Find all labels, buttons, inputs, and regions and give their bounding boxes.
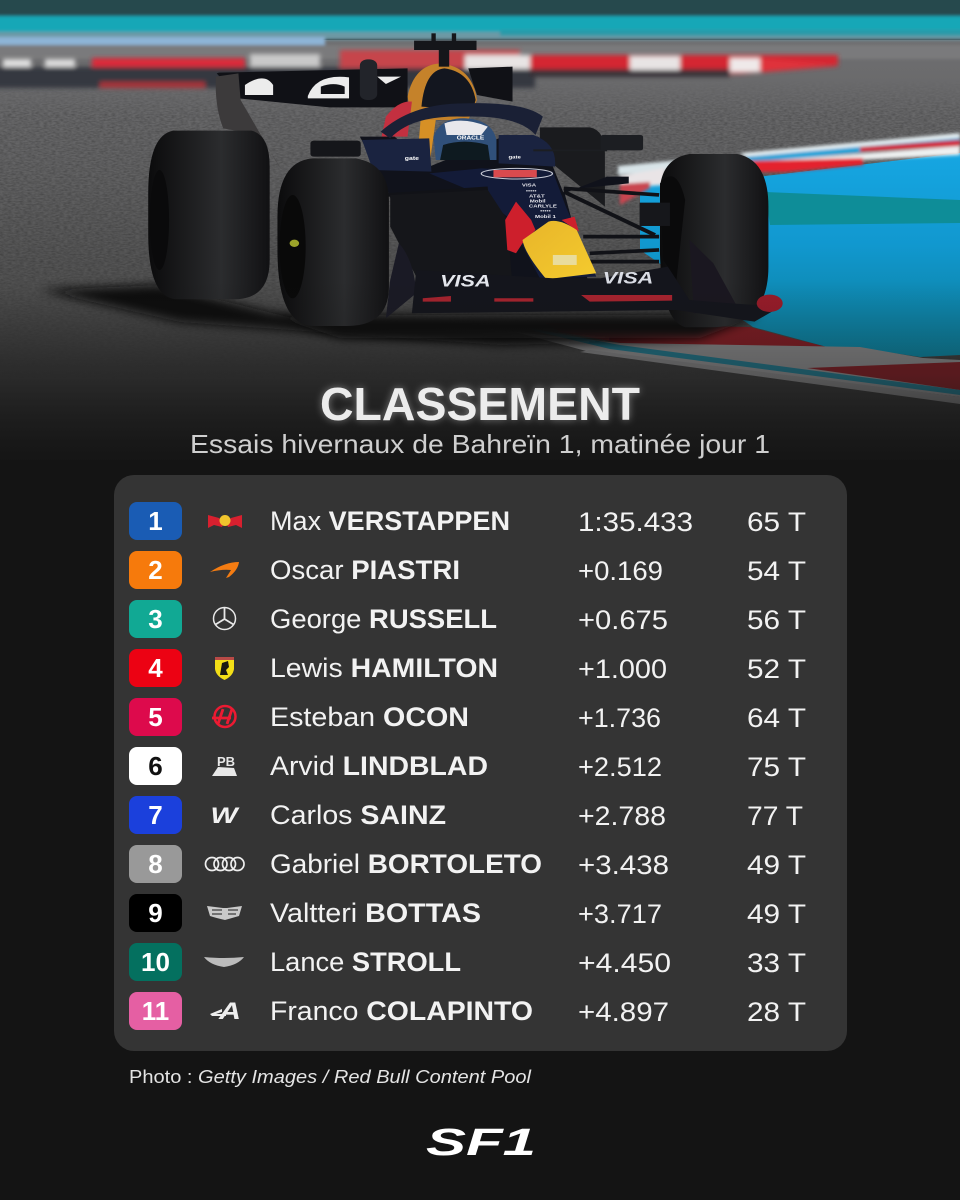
helmet	[434, 118, 496, 160]
nose sponsor list: CARLYLE	[529, 204, 557, 209]
row 11: 11	[142, 996, 169, 1026]
subtitle: Essais hivernaux de Bahreïn 1, matinée jour 1	[190, 429, 770, 459]
row 1: 1:35.433	[578, 507, 693, 537]
row 6: 6	[148, 751, 163, 781]
row 11: Franco COLAPINTO	[270, 996, 533, 1026]
icon: Cadillac	[207, 906, 242, 920]
background teal runoff	[0, 0, 960, 59]
row 6	[129, 747, 806, 785]
row 4: +1.000	[578, 654, 667, 684]
row 1: Max VERSTAPPEN	[270, 506, 510, 536]
row 2	[129, 551, 806, 589]
halo	[381, 103, 543, 138]
row 11: +4.897	[578, 997, 669, 1027]
row 1: 1	[148, 506, 163, 536]
background kerb	[0, 50, 838, 88]
nose sponsor list	[522, 183, 557, 220]
row 8: Gabriel BORTOLETO	[270, 849, 542, 879]
row 10: 33 T	[747, 948, 806, 978]
row 3: +0.675	[578, 605, 668, 635]
racing car: gate	[405, 156, 420, 162]
nose sponsor list: AT&T	[529, 194, 545, 199]
row 4: 52 T	[747, 654, 806, 684]
car shadow	[40, 285, 700, 345]
icon: Williams: W	[210, 803, 240, 828]
icon: Audi	[206, 858, 244, 870]
row 9: 49 T	[747, 899, 806, 929]
right blue runoff area	[640, 153, 960, 357]
right kerb stripes	[618, 133, 960, 205]
front suspension	[388, 188, 659, 262]
front nose body	[429, 168, 596, 278]
icon: Ferrari	[215, 657, 234, 680]
logo: SF1: SF1	[426, 1122, 536, 1164]
row 3: 56 T	[747, 605, 806, 635]
title: CLASSEMENT	[320, 378, 640, 430]
icon: Haas	[212, 706, 236, 727]
photo: race track with Red Bull car	[0, 0, 960, 470]
bottom kerb	[515, 323, 960, 404]
panel: classification table	[114, 475, 847, 1051]
row 9: Valtteri BOTTAS	[270, 898, 481, 928]
row 3	[129, 600, 806, 638]
VISA wing labels: VISA	[440, 273, 491, 291]
left front endplate	[386, 243, 416, 318]
row 5: Esteban OCON	[270, 702, 469, 732]
row 5: 64 T	[747, 703, 806, 733]
title: CLASSEMENT	[320, 378, 640, 430]
row 10: +4.450	[578, 948, 671, 978]
row 6: +2.512	[578, 752, 662, 782]
wing endplate	[216, 73, 282, 170]
row 5: 5	[148, 702, 163, 732]
row 2: Oscar PIASTRI	[270, 555, 460, 585]
row 3: 3	[148, 604, 163, 634]
row 10: Lance STROLL	[270, 947, 461, 977]
row 11: 28 T	[747, 997, 806, 1027]
nose sponsor list: VISA	[522, 183, 536, 188]
row 9	[129, 894, 806, 932]
row 6: 75 T	[747, 752, 806, 782]
row 4: 4	[148, 653, 163, 683]
row 1: 65 T	[747, 507, 806, 537]
racing car	[148, 33, 783, 327]
icon: Racing Bulls	[212, 754, 237, 776]
row 7: +2.788	[578, 801, 666, 831]
rear wing	[217, 68, 408, 107]
icon: Alpine: A	[218, 998, 241, 1025]
asphalt	[0, 40, 960, 460]
photo credit: Photo : Getty Images / Red Bull Content Pool	[129, 1067, 532, 1087]
nose sponsor list: •••••	[526, 189, 537, 194]
row 10	[129, 943, 806, 981]
row 2: 2	[148, 555, 163, 585]
front wing	[412, 267, 781, 322]
row 10: 10	[141, 947, 170, 977]
nose sponsor list: Mobil	[530, 199, 546, 204]
row 7: 77 T	[747, 801, 803, 831]
row 9: +3.717	[578, 899, 662, 929]
icon: Alpine	[210, 998, 241, 1025]
row 6: Arvid LINDBLAD	[270, 751, 488, 781]
icon: Red Bull	[208, 515, 242, 528]
icon: Aston Martin	[204, 957, 244, 967]
racing car: VISA	[603, 270, 653, 288]
row 7	[129, 796, 803, 834]
icon: McLaren	[210, 562, 239, 578]
racing car: gate	[508, 155, 521, 160]
right front upright	[689, 240, 750, 313]
red bull engine-cover colours	[382, 102, 412, 137]
row 4	[129, 649, 806, 687]
front brake ducts	[640, 203, 670, 226]
row 3: George RUSSELL	[270, 604, 497, 634]
row 7: 7	[148, 800, 163, 830]
rear right tyre behind	[540, 127, 605, 207]
row 1	[129, 502, 806, 540]
mirrors	[310, 141, 361, 157]
sponsor labels on cockpit: ORACLE	[457, 136, 484, 141]
row 2: +0.169	[578, 556, 663, 586]
asphalt grain	[0, 92, 960, 314]
row 9: 9	[148, 898, 163, 928]
right front tyre	[660, 154, 768, 327]
row 7: Carlos SAINZ	[270, 800, 446, 830]
row 4: Lewis HAMILTON	[270, 653, 498, 683]
row 8: 8	[148, 849, 163, 879]
row 8: +3.438	[578, 850, 669, 880]
left front tyre	[277, 158, 389, 326]
nose red and yellow	[505, 202, 596, 279]
nose sponsor list: •••••	[540, 209, 551, 214]
row 11	[129, 992, 806, 1030]
icon: Racing Bulls: PB	[217, 754, 235, 769]
left rear tyre	[148, 131, 270, 299]
icon: Mercedes	[214, 608, 236, 630]
row 2: 54 T	[747, 556, 806, 586]
row 8: 49 T	[747, 850, 806, 880]
photo fade to black	[0, 280, 960, 470]
cockpit and side pods	[360, 137, 629, 307]
row 5	[129, 698, 806, 736]
nose sponsor list: Mobil 1	[535, 215, 556, 220]
row 8	[129, 845, 806, 883]
row 5: +1.736	[578, 703, 661, 733]
airbox and rear parts	[408, 63, 477, 120]
chassis side shadow	[390, 190, 512, 277]
